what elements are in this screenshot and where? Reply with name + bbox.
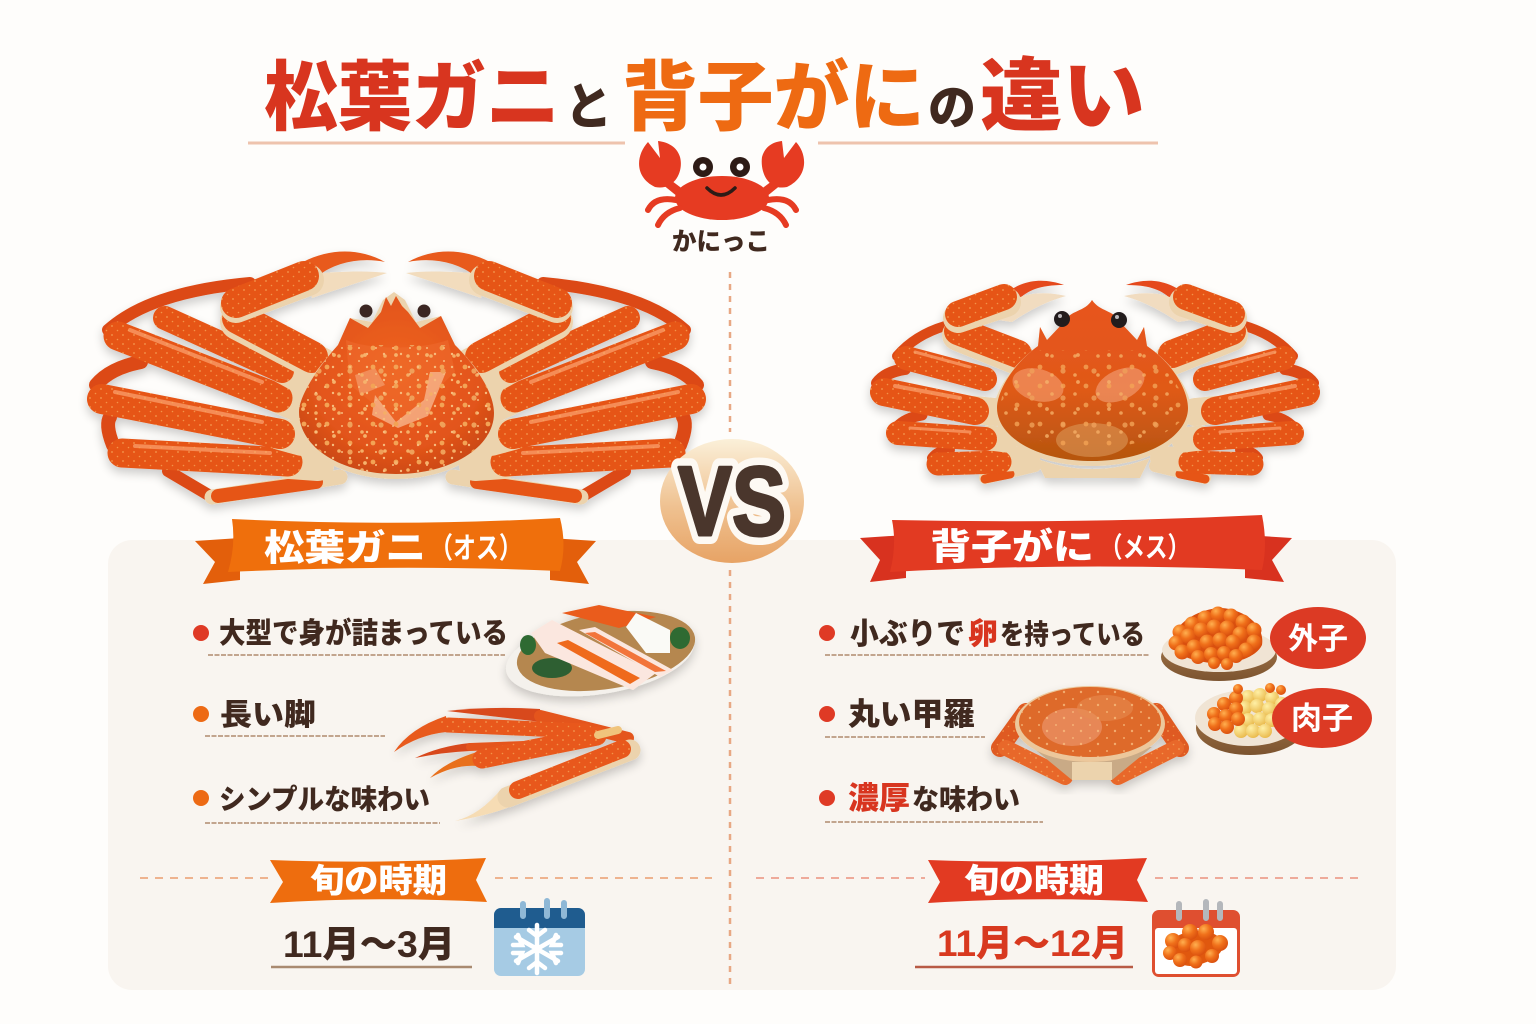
list: 背子がに features: [819, 618, 1150, 822]
ribbon: 松葉ガニ（オス）: [195, 518, 596, 584]
illustration: 内子 roe on wooden plate: [1195, 683, 1304, 755]
list: 松葉ガニ features: シンプルな味わい: [219, 784, 430, 815]
list: 背子がに features: 卵: [968, 618, 998, 651]
list: 背子がに features: を持っている: [1000, 619, 1145, 650]
title: [264, 52, 1145, 141]
badge: 肉子: 肉子: [1291, 701, 1353, 736]
list: 背子がに features: 濃厚: [848, 781, 910, 816]
ribbon: 松葉ガニ（オス）: 松葉ガニ: [264, 527, 426, 568]
badge: 外子: 外子: [1288, 623, 1348, 656]
season: 背子がに: [756, 858, 1365, 967]
ribbon: 松葉ガニ（オス）: （オス）: [430, 533, 522, 565]
title: と: [565, 79, 612, 135]
panel: comparison background: [108, 540, 1396, 990]
illustration: 外子 roe on wooden plate: [1161, 606, 1277, 681]
ribbon: 背子がに（メス）: [860, 515, 1292, 582]
list: 背子がに features: 丸い甲羅: [848, 697, 975, 732]
illustration: 背子がに crab: [877, 281, 1313, 479]
season: 松葉ガニ: 11月～3月: [283, 924, 455, 965]
ribbon: 背子がに（メス）: 背子がに: [930, 526, 1094, 567]
list: 松葉ガニ features: 長い脚: [220, 699, 316, 732]
list: 背子がに features: 小ぶりで: [850, 618, 965, 651]
badge: 外子: [1270, 607, 1366, 669]
season: 背子がに: 旬の時期: [964, 862, 1104, 899]
badge: 肉子: [1272, 688, 1372, 748]
list: 松葉ガニ features: [193, 616, 508, 823]
icon: roe calendar: [1152, 902, 1240, 977]
mascot: かにっこ crab: かにっこ: [672, 228, 770, 256]
illustration: long crab legs: [394, 708, 630, 821]
list: 背子がに features: な味わい: [912, 784, 1020, 815]
center divider: [729, 272, 731, 985]
VS badge: VS: [678, 446, 786, 556]
title: の: [928, 82, 976, 135]
season: 背子がに: 11月～12月: [937, 923, 1128, 964]
list: 松葉ガニ features: 大型で身が詰まっている: [219, 616, 508, 650]
icon: snow calendar: [494, 901, 585, 976]
title: 背子がに: [622, 56, 925, 141]
title: 違い: [980, 52, 1145, 141]
season: 松葉ガニ: 旬の時期: [310, 862, 447, 899]
mascot: かにっこ crab: [639, 141, 804, 256]
illustration: crab meat plate: [500, 599, 701, 708]
ribbon: 背子がに（メス）: （メス）: [1100, 532, 1190, 563]
season: 松葉ガニ: [140, 858, 712, 967]
title: 松葉ガニ: [264, 56, 560, 141]
illustration: 松葉ガニ crab: [96, 252, 697, 497]
VS badge: VS: [678, 446, 786, 556]
illustration: round female crab: [1000, 686, 1180, 780]
